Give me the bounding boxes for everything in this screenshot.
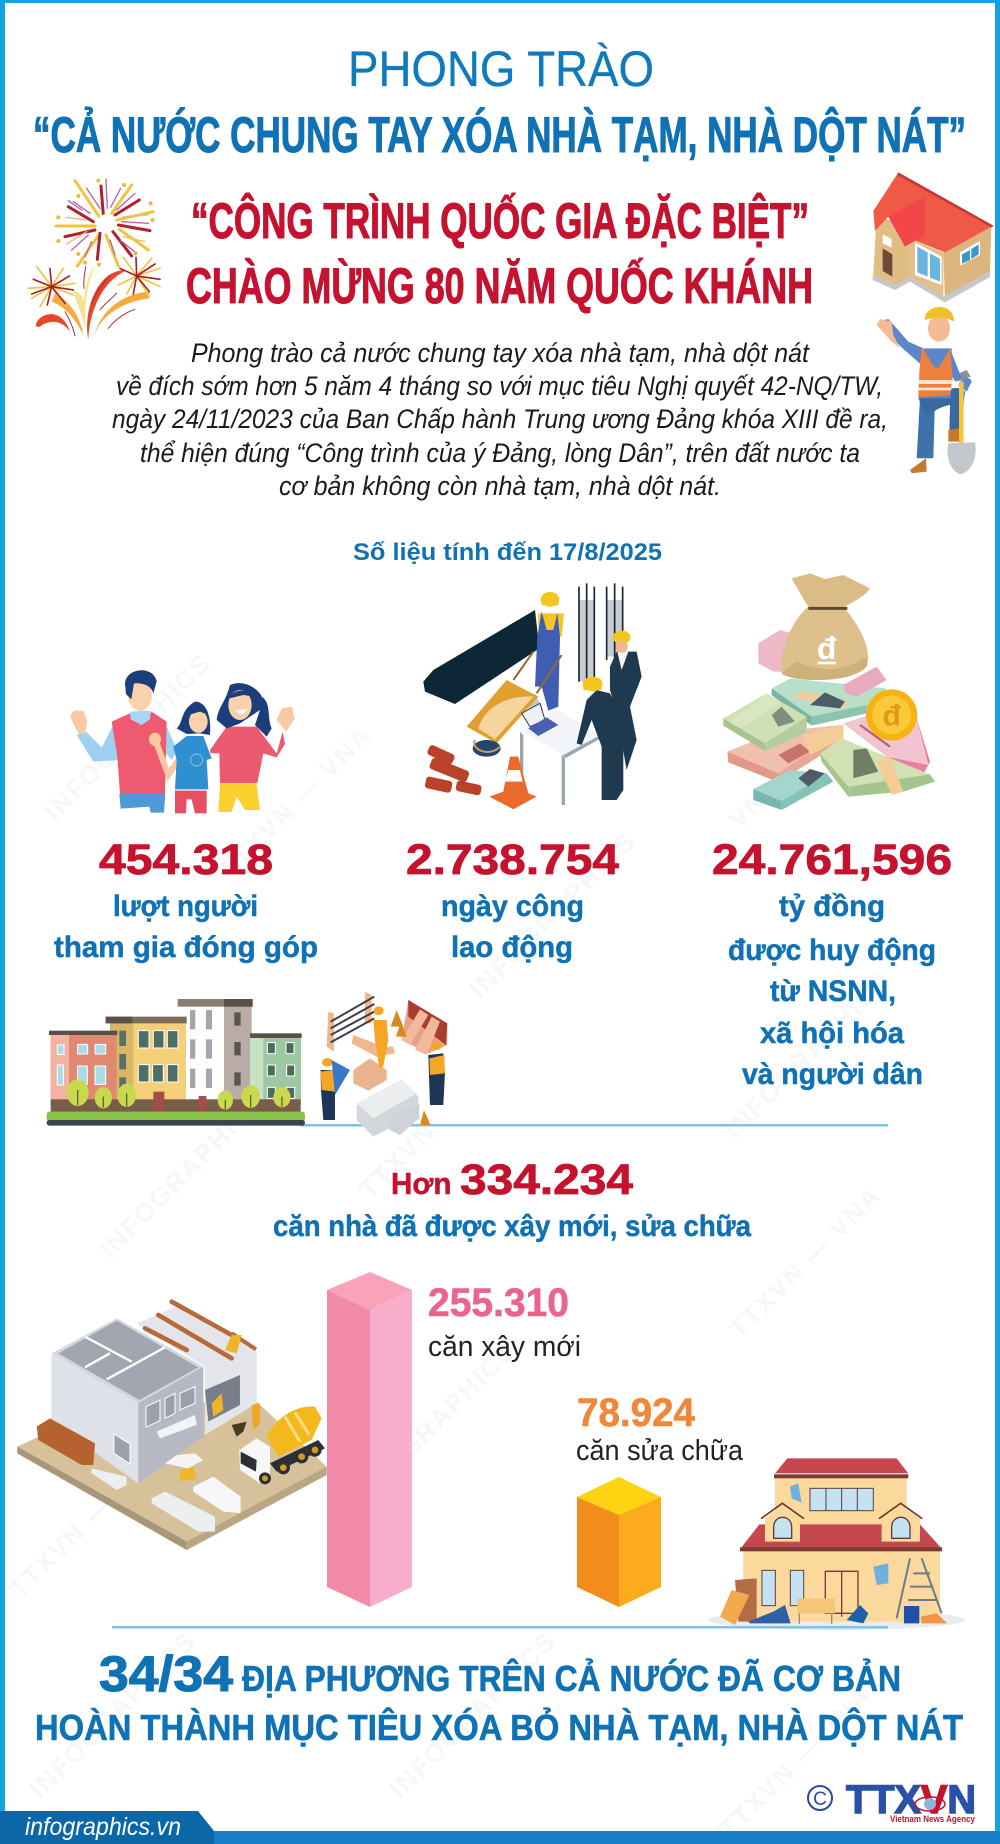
icon: city street <box>47 999 305 1126</box>
label line 3: từ NSNN, <box>770 975 896 1008</box>
data date: Số liệu tính đến 17/8/2025 <box>353 539 662 566</box>
number: 454.318 <box>99 836 273 884</box>
icon: family <box>70 670 295 813</box>
bottom bar <box>0 1831 1000 1844</box>
icon: house under construction <box>17 1302 327 1550</box>
logo: TTXVN <box>808 1778 976 1824</box>
watermark pattern: TTXVN — VNA <box>713 1680 877 1844</box>
copyright symbol: C <box>813 1789 827 1810</box>
icon: waving worker <box>877 307 976 474</box>
label line 5: và người dân <box>742 1058 923 1091</box>
caption: căn nhà đã được xây mới, sửa chữa <box>273 1210 751 1243</box>
intro line 4: thể hiện đúng “Công trình của ý Đảng, lòng Dân”, trên đất nước ta <box>140 438 860 468</box>
watermark pattern: INFOGRAPHICS <box>23 1625 202 1804</box>
watermark pattern <box>3 647 897 1844</box>
watermark pattern: TTXVN — VNA <box>3 1440 167 1604</box>
website: infographics.vn <box>25 1813 181 1841</box>
icon: house <box>873 172 993 302</box>
icon: money pile <box>723 573 935 810</box>
website tab <box>0 1811 214 1844</box>
prefix: Hơn <box>391 1166 452 1201</box>
title <box>33 41 966 163</box>
agency name: Vietnam News Agency <box>890 1814 975 1824</box>
title line 1: PHONG TRÀO <box>348 41 654 97</box>
watermark pattern: TTXVN — VNA <box>723 1180 887 1344</box>
icon: construction crew <box>321 992 447 1137</box>
intro paragraph <box>112 338 888 501</box>
watermark pattern: TTXVN <box>353 1116 442 1204</box>
label: repaired houses <box>576 1391 744 1467</box>
total number: 334.234 <box>460 1156 633 1204</box>
icon: fireworks <box>28 179 160 339</box>
stat: people <box>54 836 318 964</box>
icon: workers and materials <box>423 583 642 809</box>
watermark pattern: VNA <box>723 770 787 834</box>
bar: new houses <box>327 1272 412 1607</box>
watermark pattern: INFOGRAPHICS <box>463 825 642 1004</box>
figure: 34/34 <box>99 1646 233 1702</box>
value: 255.310 <box>428 1281 569 1325</box>
section total <box>273 1156 751 1243</box>
wordmark: TTXVN <box>846 1778 976 1822</box>
watermark pattern: INFOGRAPHICS <box>38 647 217 826</box>
caption: căn sửa chữa <box>576 1435 744 1467</box>
label: new houses <box>428 1281 581 1363</box>
icon: repaired house <box>708 1458 965 1630</box>
watermark pattern: INFOGRAPHICS <box>343 1335 522 1514</box>
label line 4: xã hội hóa <box>760 1017 904 1050</box>
watermark pattern: INFOGRAPHICS <box>718 965 897 1144</box>
globe mark <box>915 1797 945 1811</box>
watermark pattern: INFOGRAPHICS <box>383 1625 562 1804</box>
intro line 5: cơ bản không còn nhà tạm, nhà dột nát. <box>279 471 721 501</box>
copyright symbol <box>808 1786 832 1810</box>
stat: funding <box>712 836 952 1091</box>
label line 1: lượt người <box>113 890 258 923</box>
caption: căn xây mới <box>428 1331 581 1363</box>
watermark pattern: INFOGRAPHICS <box>93 1085 272 1264</box>
label line 2: lao động <box>451 931 573 964</box>
stat: workdays <box>406 836 619 964</box>
label line 2: tham gia đóng góp <box>54 931 318 964</box>
label line 1: tỷ đồng <box>779 890 885 923</box>
bar: repaired houses <box>577 1477 661 1607</box>
icon: money pile: đ <box>882 700 901 733</box>
icon: money pile: đ <box>817 630 837 666</box>
value: 78.924 <box>577 1391 696 1435</box>
intro line 3: ngày 24/11/2023 của Ban Chấp hành Trung ương Đảng khóa XIII đề ra, <box>112 404 888 434</box>
intro line 1: Phong trào cả nước chung tay xóa nhà tạm, nhà dột nát <box>191 338 810 368</box>
label line 2: được huy động <box>728 934 936 967</box>
label line 1: ngày công <box>441 890 584 923</box>
conclusion line 1: ĐỊA PHƯƠNG TRÊN CẢ NƯỚC ĐÃ CƠ BẢN <box>242 1657 901 1699</box>
watermark pattern: TTXVN — VNA <box>213 720 377 884</box>
intro line 2: về đích sớm hơn 5 năm 4 tháng so với mục tiêu Nghị quyết 42-NQ/TW, <box>116 371 883 401</box>
number: 24.761,596 <box>712 836 952 884</box>
tab shape <box>0 1811 214 1844</box>
red heading <box>186 192 813 314</box>
number: 2.738.754 <box>406 836 619 884</box>
conclusion <box>35 1646 963 1748</box>
